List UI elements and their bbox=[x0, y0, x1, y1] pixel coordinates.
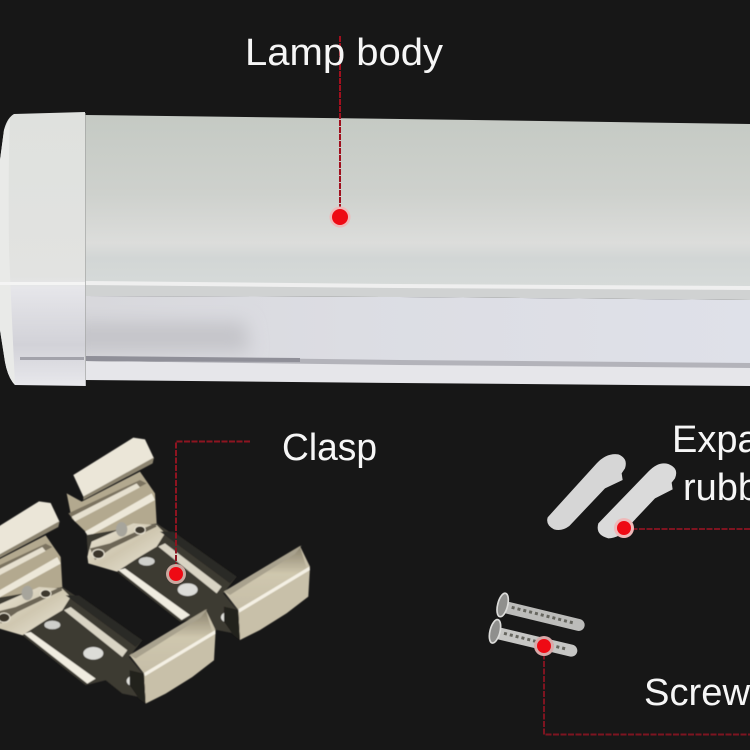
leader line: expansion rubber bbox=[624, 528, 750, 530]
lamp body bbox=[0, 112, 750, 386]
leader line: screw bbox=[544, 646, 750, 734]
marker: expansion rubber bbox=[614, 518, 634, 538]
label: lamp body: Lamp body bbox=[245, 32, 443, 74]
marker: lamp body bbox=[330, 206, 350, 228]
leader line: lamp body bbox=[339, 36, 341, 217]
expansion rubber plugs bbox=[547, 454, 676, 538]
label: clasp: Clasp bbox=[282, 427, 377, 469]
lamp lower housing bbox=[70, 281, 750, 386]
label: screw: Screw bbox=[644, 672, 750, 714]
leader line: clasp bbox=[176, 442, 250, 574]
marker: clasp bbox=[166, 564, 186, 584]
clasp: left bracket and right bracket bbox=[0, 438, 310, 704]
lamp diffuser bbox=[85, 115, 750, 288]
lamp end cap bbox=[0, 112, 86, 386]
screws bbox=[487, 592, 579, 651]
marker: screw bbox=[534, 636, 554, 656]
